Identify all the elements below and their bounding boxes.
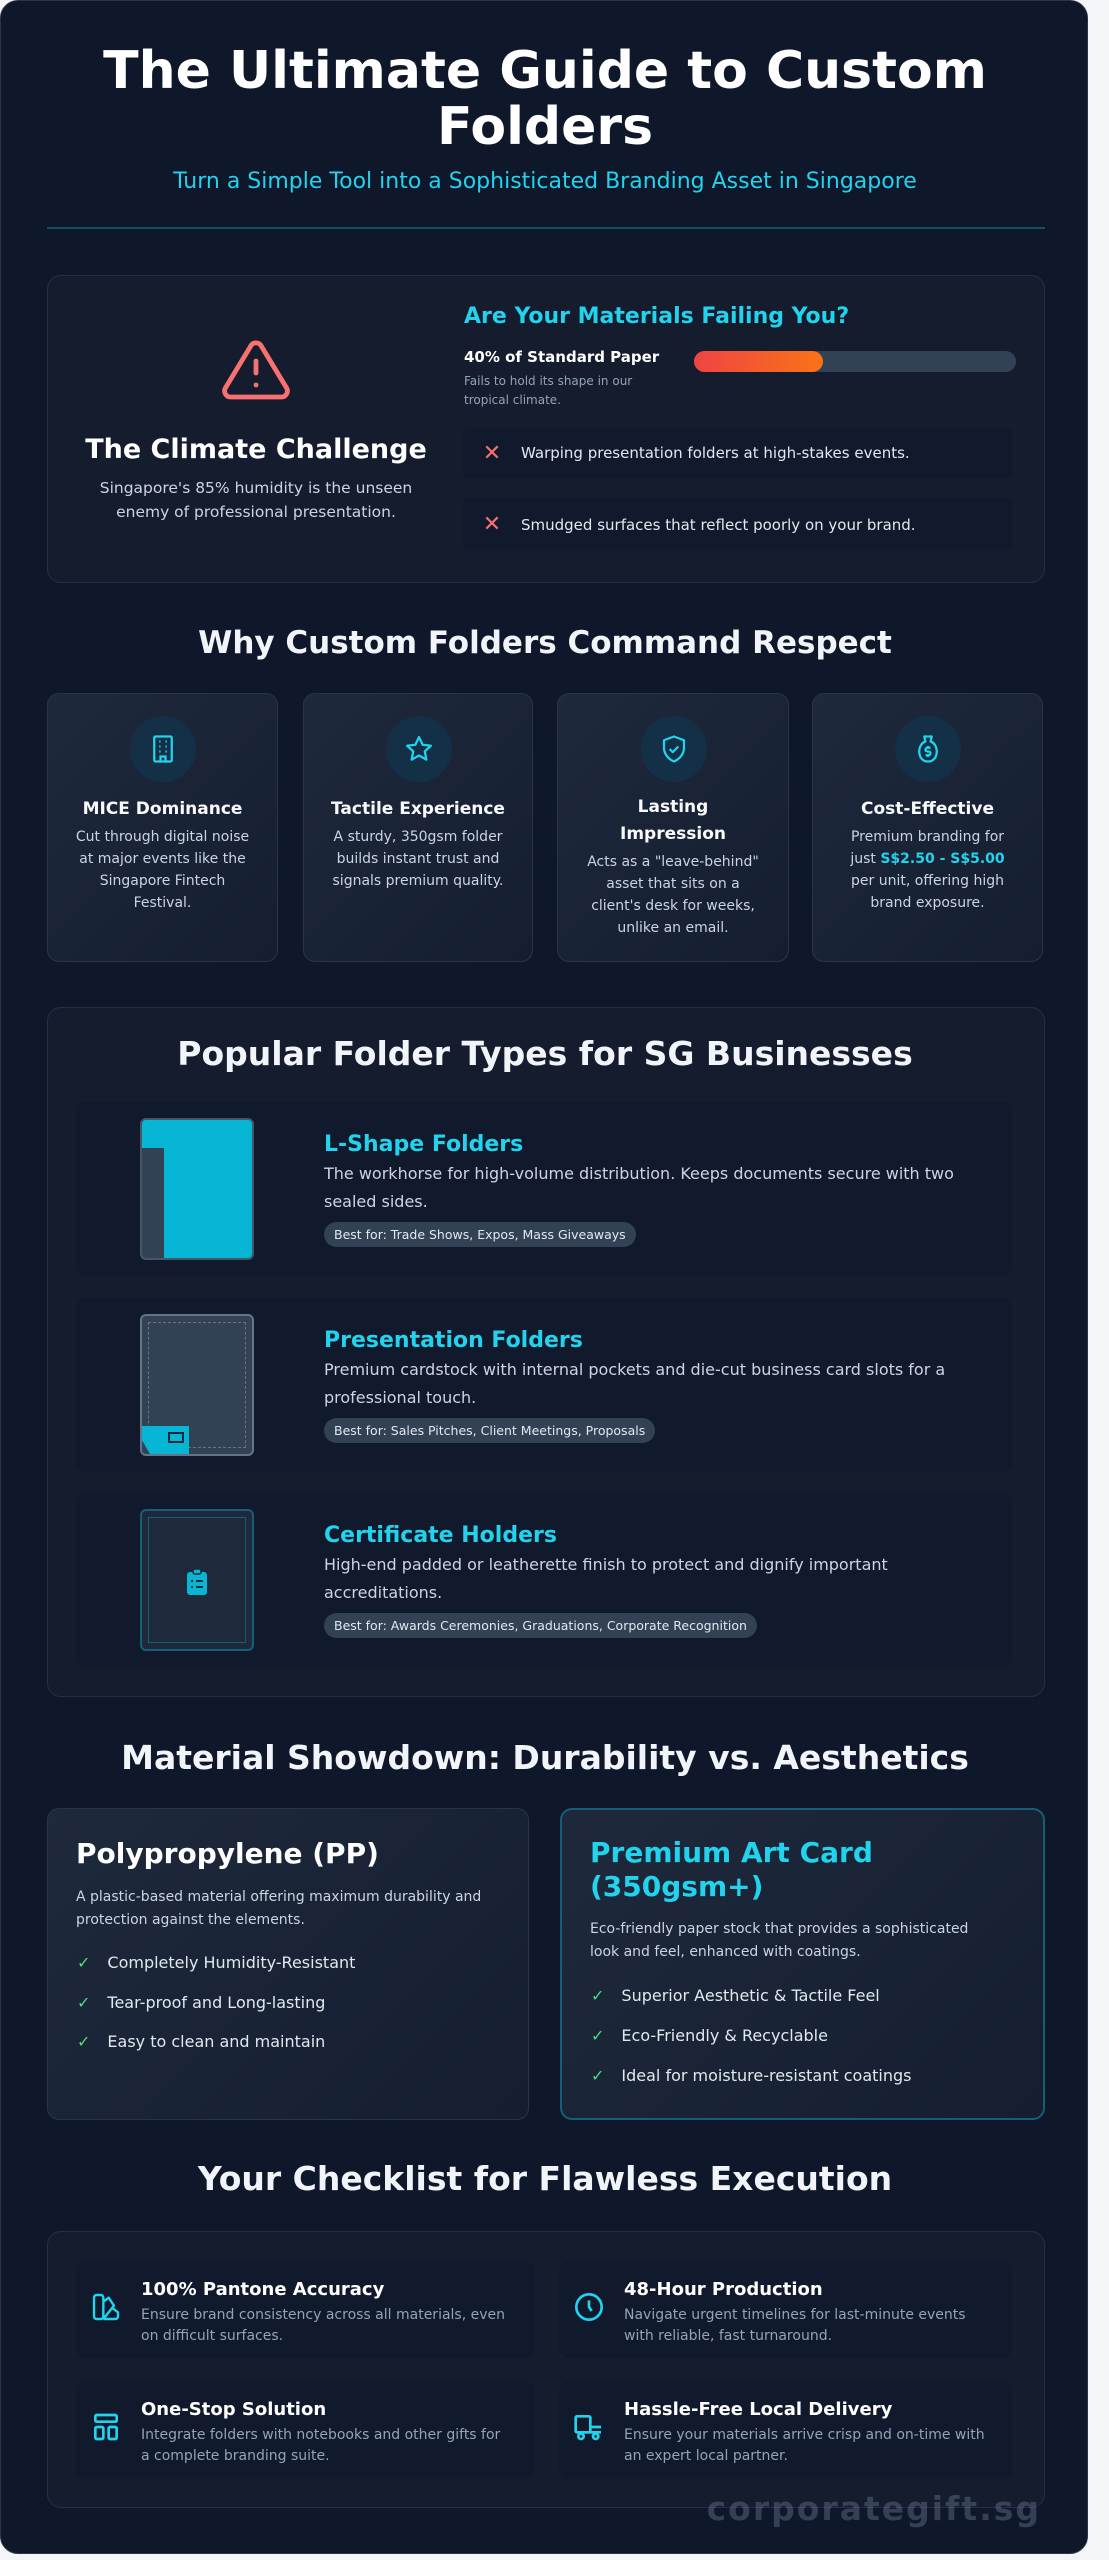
card: polypropylene: ✓ Tear-proof and Long-lasting bbox=[77, 1993, 325, 2012]
card: premium art card bbox=[560, 1808, 1045, 2120]
card: premium art card: ✓ Eco-Friendly & Recyclable bbox=[591, 2026, 828, 2045]
row: certificate: Certificate Holders bbox=[324, 1523, 557, 1548]
title bbox=[103, 41, 987, 157]
illustration: L-shape folder bbox=[140, 1118, 254, 1260]
item: smudged: Smudged surfaces that reflect poorly on your brand. bbox=[521, 516, 916, 534]
card: lasting: Acts as a "leave-behind" asset that sits on a client's desk for weeks, unlike an email. bbox=[587, 854, 759, 936]
text: humidity: Singapore's 85% humidity is the unseen enemy of professional presentation. bbox=[100, 479, 412, 521]
row: presentation: Premium cardstock with internal pockets and die-cut business card slots for a professional touch. bbox=[324, 1360, 945, 1407]
item: delivery: Hassle-Free Local Delivery bbox=[624, 2399, 892, 2420]
illustration: presentation folder bbox=[140, 1314, 254, 1456]
card: premium art card: ✓ Ideal for moisture-resistant coatings bbox=[591, 2066, 911, 2085]
row: certificate bbox=[76, 1493, 1012, 1667]
item: pantone bbox=[76, 2261, 534, 2358]
card: premium art card: ✓ Superior Aesthetic & Tactile Feel bbox=[591, 1986, 880, 2005]
item: warping: Warping presentation folders at high-stakes events. bbox=[521, 444, 910, 462]
card: MICE: Cut through digital noise at major events like the Singapore Fintech Festival. bbox=[76, 829, 249, 911]
card: premium art card: (350gsm+) bbox=[590, 1870, 763, 1903]
panel: checklist bbox=[47, 2231, 1045, 2508]
card: MICE bbox=[47, 693, 278, 962]
card: MICE: MICE Dominance bbox=[83, 799, 242, 819]
row: presentation bbox=[140, 1314, 944, 1456]
item: warping bbox=[463, 428, 1012, 478]
stat: 40%: 40% of Standard Paper bbox=[464, 348, 659, 366]
icon: warning bbox=[222, 340, 290, 400]
row: presentation: Presentation Folders bbox=[324, 1328, 583, 1353]
card: polypropylene: Polypropylene (PP) bbox=[76, 1837, 379, 1870]
bar chart bbox=[694, 351, 1016, 372]
row: L-shape: L-Shape Folders bbox=[324, 1132, 523, 1157]
heading: material showdown: Material Showdown: Durability vs. Aesthetics bbox=[121, 1738, 969, 1777]
panel: climate challenge: Fails to hold its shape in our tropical climate. bbox=[464, 374, 632, 407]
row: L-shape: The workhorse for high-volume distribution. Keeps documents secure with two sealed sides. bbox=[324, 1164, 954, 1211]
card: cost bbox=[812, 693, 1043, 962]
card: premium art card: Premium Art Card bbox=[590, 1836, 873, 1869]
card: polypropylene bbox=[47, 1808, 529, 2120]
panel: folder types bbox=[47, 1007, 1045, 1697]
item: delivery: Ensure your materials arrive crisp and on-time with an expert local partner. bbox=[624, 2427, 985, 2464]
card: cost: Premium branding for just S$2.50 - S$5.00 per unit, offering high brand exposure. bbox=[850, 829, 1005, 911]
subtitle: Turn a Simple Tool into a Sophisticated Branding Asset in Singapore bbox=[173, 169, 917, 194]
heading: folder types: Popular Folder Types for SG Businesses bbox=[177, 1034, 913, 1073]
title: Folders bbox=[437, 97, 653, 157]
card: lasting: Impression bbox=[620, 824, 726, 844]
item: pantone: Ensure brand consistency across all materials, even on difficult surfaces. bbox=[141, 2307, 505, 2344]
card: tactile: A sturdy, 350gsm folder builds instant trust and signals premium quality. bbox=[333, 829, 503, 889]
item: delivery bbox=[559, 2381, 1012, 2479]
watermark: corporategift.sg bbox=[707, 2489, 1041, 2528]
card: tactile bbox=[303, 693, 533, 962]
card: tactile: Tactile Experience bbox=[331, 799, 505, 819]
item: one-stop bbox=[76, 2381, 534, 2479]
illustration: certificate holder bbox=[140, 1509, 254, 1651]
heading: climate challenge: The Climate Challenge bbox=[85, 434, 427, 465]
card: lasting bbox=[557, 693, 789, 962]
heading: failing: Are Your Materials Failing You? bbox=[464, 304, 849, 329]
heading: why: Why Custom Folders Command Respect bbox=[198, 625, 892, 661]
card: polypropylene: ✓ Completely Humidity-Resistant bbox=[77, 1953, 355, 1972]
item: pantone: 100% Pantone Accuracy bbox=[141, 2279, 384, 2300]
item: one-stop: One-Stop Solution bbox=[141, 2399, 326, 2420]
row: L-shape: Best for: Trade Shows, Expos, Mass Giveaways bbox=[334, 1227, 626, 1242]
card: polypropylene: A plastic-based material offering maximum durability and protection against the elements. bbox=[76, 1889, 481, 1928]
panel: climate challenge bbox=[47, 275, 1045, 583]
item: 48-hour: 48-Hour Production bbox=[624, 2279, 823, 2300]
row: presentation: Best for: Sales Pitches, Client Meetings, Proposals bbox=[334, 1423, 645, 1438]
item: warping: ✕ bbox=[483, 440, 501, 466]
card: polypropylene: ✓ Easy to clean and maintain bbox=[77, 2032, 325, 2051]
row: certificate: High-end padded or leatherette finish to protect and dignify important accreditations. bbox=[324, 1555, 888, 1602]
item: 48-hour bbox=[559, 2261, 1012, 2358]
item: one-stop: Integrate folders with notebooks and other gifts for a complete branding suite. bbox=[141, 2427, 500, 2464]
item: 48-hour: Navigate urgent timelines for last-minute events with reliable, fast turnaround. bbox=[624, 2307, 966, 2344]
card: lasting: Lasting bbox=[638, 797, 708, 817]
card: premium art card: Eco-friendly paper stock that provides a sophisticated look and feel, enhanced with coatings. bbox=[590, 1921, 968, 1960]
heading: checklist: Your Checklist for Flawless Execution bbox=[198, 2159, 892, 2198]
item: smudged: ✕ bbox=[483, 512, 501, 537]
row: L-shape bbox=[76, 1102, 1012, 1276]
card: cost: Cost-Effective bbox=[861, 799, 994, 819]
row: certificate: Best for: Awards Ceremonies, Graduations, Corporate Recognition bbox=[334, 1618, 747, 1633]
title: The Ultimate Guide to Custom bbox=[103, 41, 987, 101]
item: smudged bbox=[463, 498, 1012, 551]
